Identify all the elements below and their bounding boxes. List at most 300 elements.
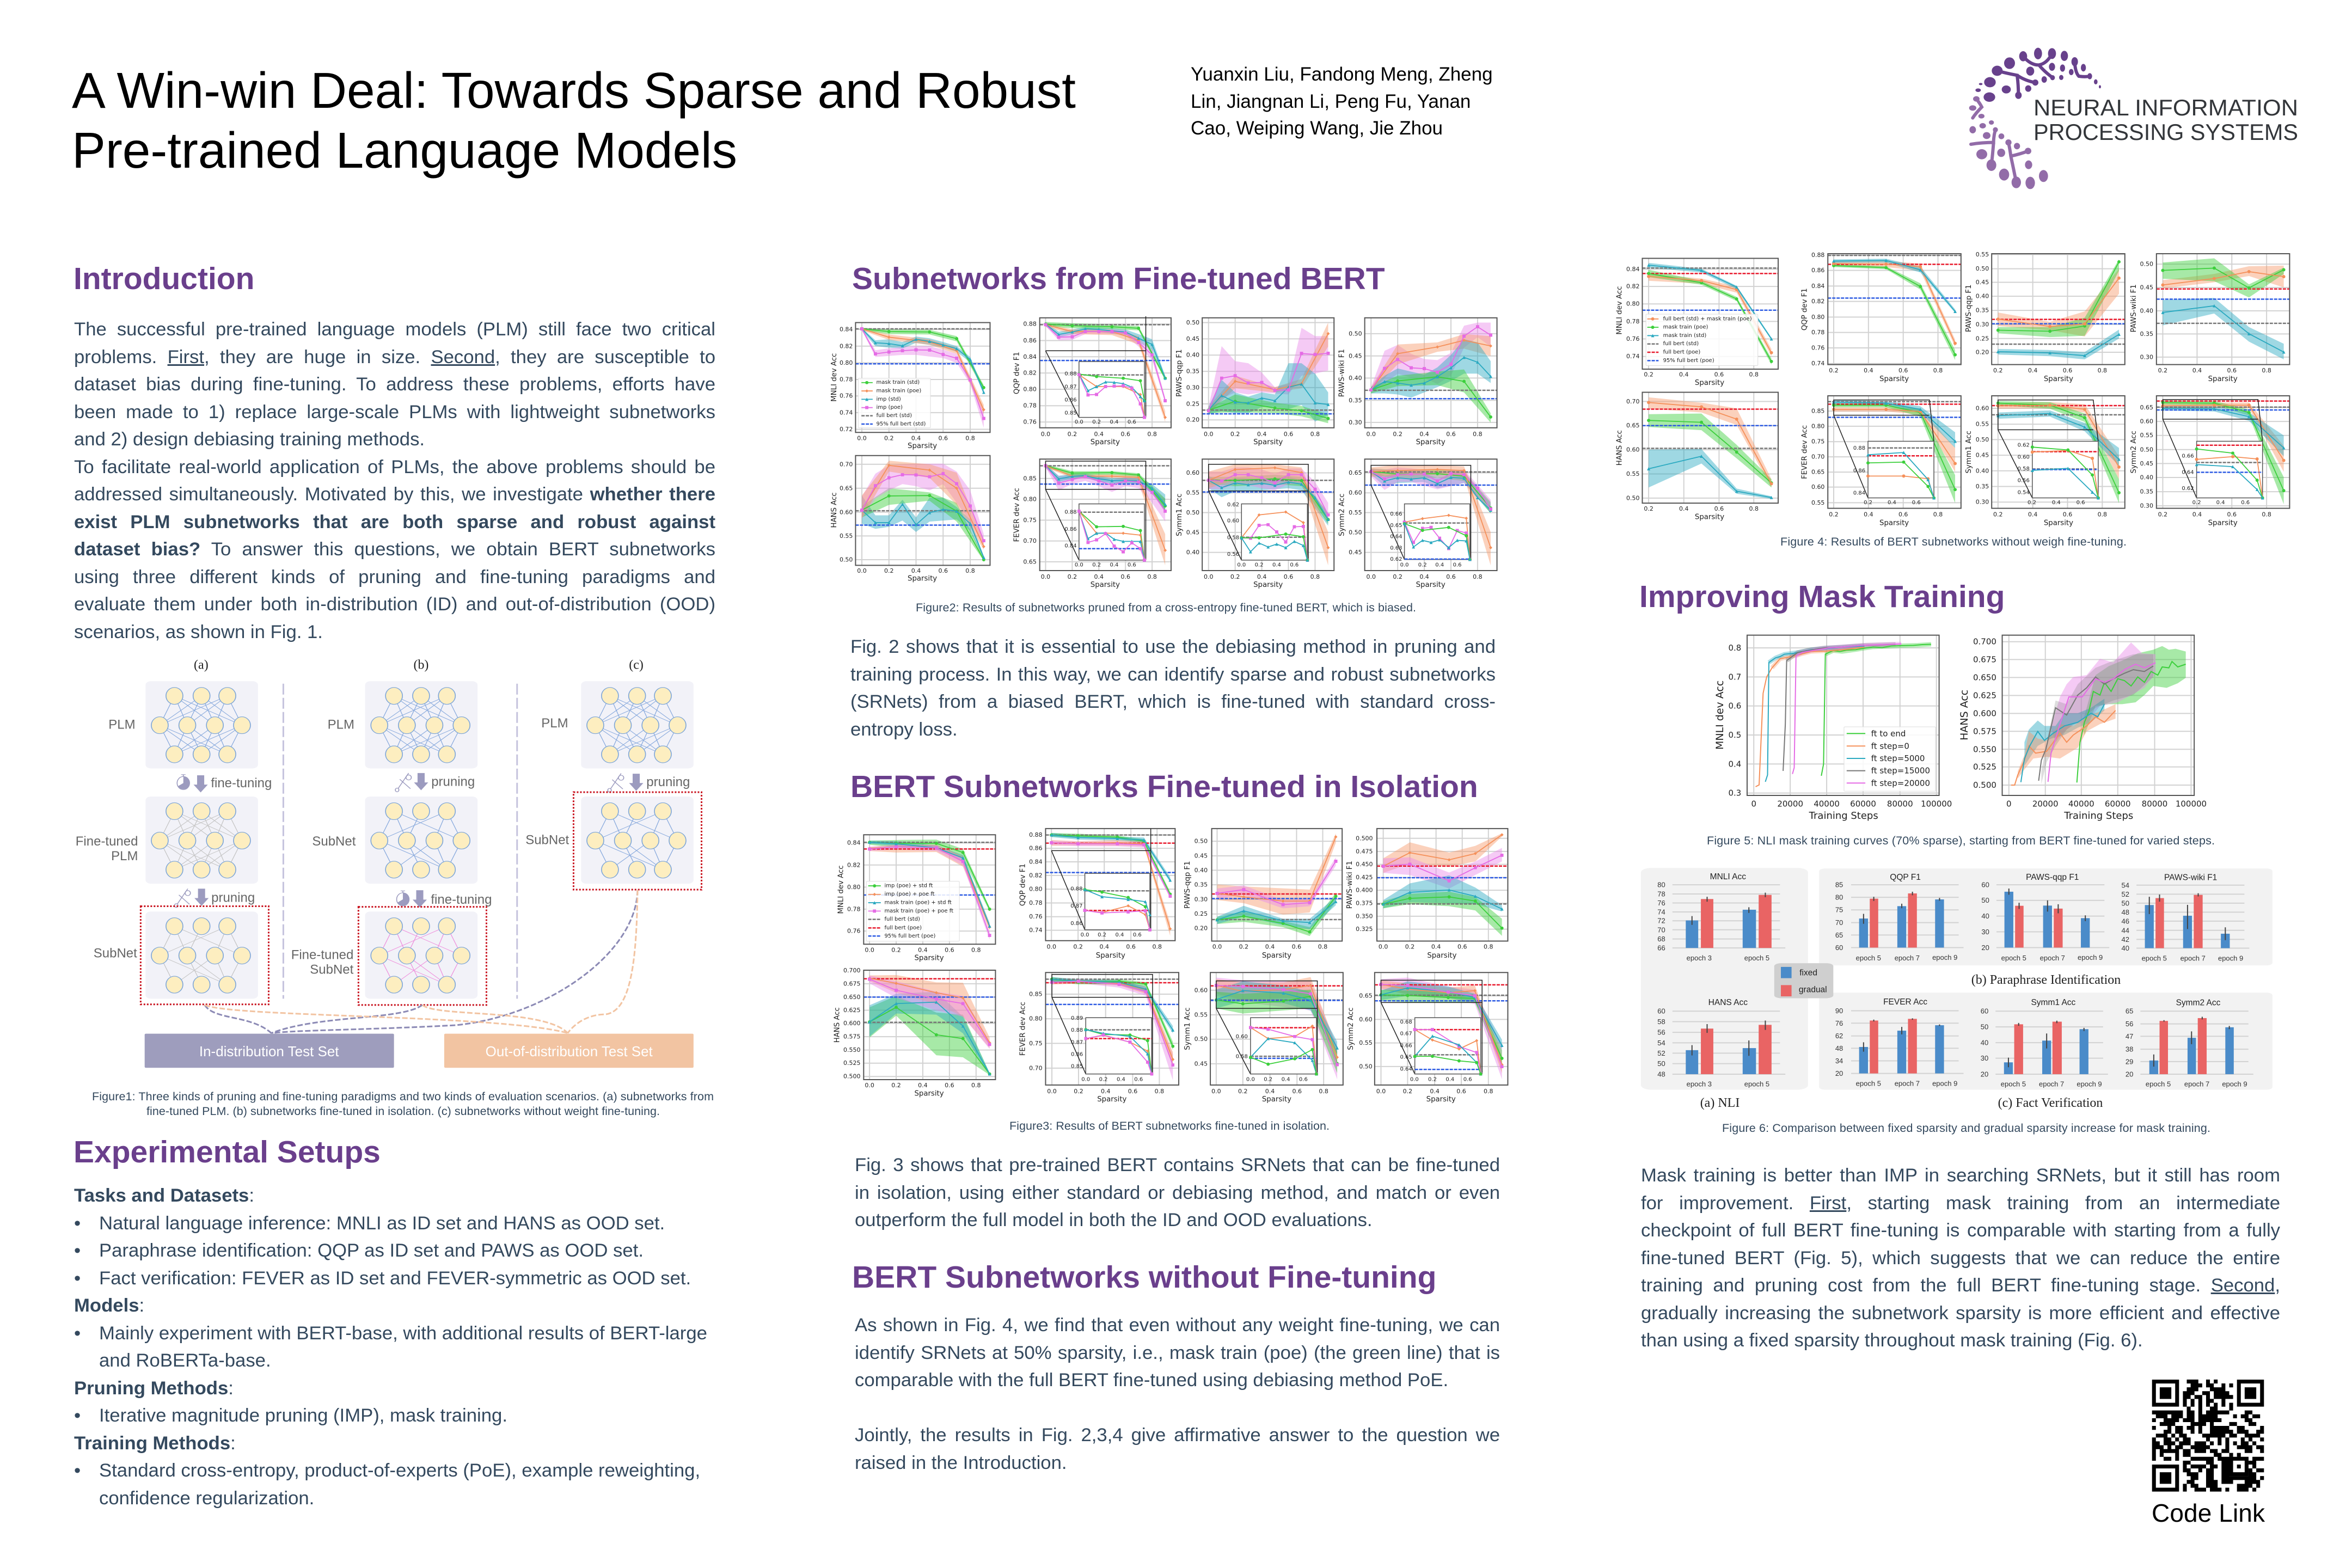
chart: MNLI Acc bars (1657, 872, 1785, 962)
chart: HANS Acc bars: 56 (1657, 1028, 1665, 1037)
chart: QQP dev F1: 0.76 (1029, 913, 1043, 920)
chart: MNLI Acc bars: 78 (1657, 890, 1665, 898)
chart: Symm1 Acc: 0.30 (1976, 499, 1989, 506)
chart: Symm1 Acc: 0.6 (1293, 1088, 1302, 1095)
chart: Symm2 Acc: Sparsity (1416, 581, 1445, 589)
chart: FEVER dev Acc: 0.2 (1092, 562, 1101, 568)
text block: introduction: The successful pre-trained language models (PLM) still face two critical (74, 319, 715, 340)
chart: PAWS-qqp F1 (1965, 251, 2125, 383)
chart: Symm2 Acc bars: 20 (2126, 1070, 2133, 1078)
chart: Symm1 Acc: 0.6 (2077, 500, 2085, 506)
chart: PAWS-wiki F1 bars: 46 (2122, 917, 2129, 925)
chart: PAWS-wiki F1 (1338, 318, 1497, 446)
chart: Symm1 Acc (1965, 396, 2125, 528)
figure 3 caption: Figure3: Results of BERT subnetworks fine-tuned in isolation. (1009, 1119, 1330, 1132)
chart: FEVER dev Acc: 0.89 (1071, 1015, 1083, 1021)
chart: HANS Acc: 0.2 (1644, 505, 1653, 512)
chart: QQP dev F1: 0.78 (1023, 402, 1037, 409)
chart: Symm1 Acc: 0.0 (1211, 1088, 1221, 1095)
chart: HANS Acc training curve: 0 (2006, 799, 2012, 809)
chart: Symm2 Acc: 0.2 (1428, 1076, 1437, 1082)
legend: fixed and gradual (1774, 963, 1833, 998)
chart: QQP dev F1 (1019, 829, 1175, 960)
figure 6 subcaptions: (c) Fact Verification (1998, 1096, 2103, 1110)
chart: FEVER dev Acc: 0.6 (1134, 1076, 1143, 1082)
chart: PAWS-wiki F1: PAWS-wiki F1 (1338, 349, 1346, 397)
chart: QQP dev F1: Sparsity (1096, 952, 1125, 960)
chart: HANS Acc: Sparsity (1695, 513, 1724, 521)
chart: PAWS-wiki F1: 0.400 (1356, 887, 1373, 894)
text block: experimental setups list: Iterative magnitude pruning (IMP), mask training. (99, 1405, 507, 1426)
chart: Symm1 Acc: 0.62 (2018, 443, 2030, 449)
chart: Symm1 Acc: 0.50 (1195, 1036, 1208, 1043)
chart: Symm2 Acc: 0.64 (1390, 534, 1402, 540)
chart: Symm1 Acc: 0.0 (1204, 573, 1214, 580)
text block: experimental setups list: • (74, 1213, 81, 1234)
chart: MNLI dev Acc training curve: 100000 (1921, 799, 1952, 809)
chart: Symm1 Acc: 0.45 (1186, 529, 1199, 536)
chart: Symm1 Acc: 0.58 (1227, 535, 1239, 541)
chart: PAWS-wiki F1: 0.4 (1419, 431, 1429, 438)
chart: PAWS-qqp F1: Sparsity (2044, 375, 2073, 383)
chart: HANS Acc: 0.675 (843, 980, 861, 987)
authors: Cao, Weiping Wang, Jie Zhou (1191, 118, 1443, 139)
column c networks: SubNet (525, 832, 569, 847)
text block: introduction: addressed simultaneously. Motivated by this, we investigate whether there (74, 484, 715, 505)
text block: mask training discussion: gradually increasing the subnetwork sparsity is more efficient and effective (1641, 1302, 2280, 1323)
chart: PAWS-qqp F1: 0.20 (1195, 925, 1208, 932)
chart: MNLI dev Acc: imp (poe) + std ft (884, 883, 933, 889)
chart: QQP dev F1: 0.2 (1068, 431, 1077, 438)
chart: QQP dev F1: 0.88 (1029, 831, 1043, 838)
text block: introduction: evaluate them under both in-distribution (ID) and out-of-distribution (OOD) (74, 594, 715, 615)
chart: Symm1 Acc bars: 60 (1981, 1007, 1988, 1015)
chart: QQP dev F1: 0.88 (1811, 252, 1824, 259)
text block: introduction: problems. First, they are huge in size. Second, they are susceptible to (74, 346, 715, 367)
text block: figure 3 discussion: outperform the full model in both the ID and OOD evaluations. (855, 1210, 1373, 1230)
chart: Symm2 Acc bars: 29 (2126, 1057, 2133, 1065)
chart: FEVER dev Acc: 0.65 (1023, 558, 1037, 565)
chart: Symm1 Acc: 0.2 (2028, 500, 2036, 506)
chart: FEVER Acc bars: epoch 5 (1856, 1080, 1881, 1088)
chart: QQP dev F1: 0.8 (1153, 944, 1162, 951)
text block: mask training discussion: training and pruning cost from the full BERT fine-tuning stage. Second, (1641, 1275, 2280, 1296)
text block: introduction: been made to 1) replace large-scale PLMs with lightweight subnetworks (74, 402, 715, 422)
chart: PAWS-wiki F1 bars: 54 (2122, 881, 2129, 889)
chart: PAWS-qqp F1: 0.35 (1195, 881, 1208, 889)
text block: introduction: dataset bias? To answer this questions, we obtain BERT subnetworks (74, 539, 715, 560)
chart: FEVER Acc bars: 90 (1835, 1007, 1843, 1015)
chart: FEVER dev Acc: 0.4 (1888, 500, 1896, 506)
chart: PAWS-wiki F1 bars: 44 (2122, 926, 2129, 934)
figure 6 subcaptions: (a) NLI (1700, 1096, 1739, 1110)
chart: Symm1 Acc: 0.58 (1236, 1054, 1248, 1060)
chart: HANS Acc: 0.60 (840, 509, 853, 516)
chart: QQP dev F1: 0.84 (1029, 859, 1043, 866)
chart: MNLI dev Acc: 0.4 (1679, 371, 1688, 378)
figure 2 caption: Figure2: Results of subnetworks pruned from a cross-entropy fine-tuned BERT, which is biased. (916, 601, 1416, 614)
chart: PAWS-wiki F1: 0.475 (1356, 848, 1373, 855)
text block: introduction: exist PLM subnetworks that are both sparse and robust against (74, 512, 715, 532)
chart: Symm1 Acc: 0.35 (1976, 483, 1989, 490)
chart: PAWS-wiki F1: 0.500 (1356, 835, 1373, 842)
text block: mask training discussion (1641, 1165, 2280, 1351)
chart: Symm2 Acc: 0.50 (2140, 446, 2153, 453)
chart: PAWS-wiki F1 bars: 50 (2122, 899, 2129, 907)
chart: MNLI dev Acc: 0.2 (1644, 371, 1653, 378)
dashed evaluation arrows (205, 890, 638, 1033)
chart: PAWS-qqp F1 bars: epoch 9 (2078, 953, 2103, 961)
chart: Symm2 Acc: 0.64 (1400, 1066, 1412, 1072)
chart: FEVER dev Acc: 0.84 (1064, 543, 1077, 549)
logo: NeurIPS droplet spiral and wordmark: PROCESSING SYSTEMS (2033, 119, 2298, 145)
panel: fact verification (1819, 993, 2273, 1090)
chart: MNLI dev Acc: 0.78 (847, 905, 861, 912)
chart: HANS Acc: 0.6 (939, 567, 948, 574)
chart: MNLI dev Acc: 0.8 (1749, 371, 1759, 378)
title: Pre-trained Language Models (72, 122, 737, 179)
chart: PAWS-wiki F1: 0.425 (1356, 874, 1373, 881)
chart: MNLI dev Acc: Sparsity (1695, 379, 1724, 387)
chart: PAWS-qqp F1: 0.8 (1318, 944, 1327, 951)
chart: HANS Acc training curve: 60000 (2105, 799, 2131, 809)
text block: experimental setups list: Natural language inference: MNLI as ID set and HANS as OOD set. (99, 1213, 665, 1234)
chart: HANS Acc: 0.4 (1679, 505, 1688, 512)
chart: FEVER dev Acc: Sparsity (1879, 519, 1909, 528)
chart: MNLI Acc bars: 66 (1657, 944, 1665, 952)
chart: MNLI dev Acc: 0.82 (1626, 283, 1640, 290)
chart: MNLI dev Acc (1616, 258, 1778, 387)
chart: MNLI dev Acc: full bert (std) (884, 916, 920, 922)
chart: Symm1 Acc: 0.60 (1236, 1034, 1248, 1040)
chart: PAWS-qqp F1: 0.45 (1186, 335, 1199, 342)
text block: experimental setups list: • (74, 1405, 81, 1426)
chart: FEVER Acc bars: epoch 7 (1895, 1080, 1920, 1088)
chart: PAWS-wiki F1: Sparsity (2208, 375, 2238, 383)
chart: HANS Acc: 0.525 (843, 1059, 861, 1067)
chart: QQP F1 bars: 70 (1835, 918, 1843, 927)
chart: PAWS-wiki F1: 0.30 (1349, 419, 1362, 426)
chart: MNLI dev Acc: 0.0 (857, 434, 867, 442)
chart: PAWS-qqp F1 bars: 20 (1981, 944, 1989, 952)
chart: Symm2 Acc: 0.4 (1435, 562, 1444, 568)
chart: Symm2 Acc: 0.35 (2140, 488, 2153, 495)
chart: PAWS-wiki F1 (1346, 829, 1508, 960)
chart: Symm2 Acc: 0.65 (1400, 1055, 1412, 1061)
chart: Symm2 Acc bars (2126, 999, 2253, 1088)
chart: FEVER dev Acc: 0.8 (1933, 511, 1943, 518)
chart: PAWS-wiki F1: 0.350 (1356, 912, 1373, 920)
chart: HANS Acc: HANS Acc (830, 492, 838, 528)
chart: QQP dev F1: 0.6 (1133, 932, 1142, 938)
chart: PAWS-qqp F1 bars (1981, 873, 2109, 962)
chart: QQP dev F1: 0.0 (1046, 944, 1056, 951)
text block: figure 3 discussion: Fig. 3 shows that pre-trained BERT contains SRNets that can be fine-tuned (855, 1155, 1500, 1175)
chart: FEVER dev Acc (1019, 972, 1179, 1104)
chart: Symm2 Acc: 0.40 (2140, 474, 2153, 481)
title (72, 62, 1076, 179)
chart: MNLI dev Acc: mask train (poe) (877, 388, 921, 394)
chart: QQP dev F1: 0.86 (1064, 397, 1077, 403)
chart: HANS Acc bars: HANS Acc (1708, 998, 1748, 1007)
chart: PAWS-wiki F1 bars: epoch 7 (2180, 954, 2206, 963)
chart: Symm1 Acc: Symm1 Acc (1965, 431, 1973, 474)
chart: HANS Acc: Sparsity (908, 575, 937, 583)
chart: HANS Acc: 0.50 (840, 556, 853, 564)
chart: Symm2 Acc: 0.4 (1445, 1076, 1454, 1082)
chart: MNLI dev Acc training curve: 0.8 (1729, 643, 1741, 653)
chart: HANS Acc bars: 60 (1657, 1007, 1665, 1015)
chart: Symm1 Acc: 0.0 (1246, 1076, 1255, 1082)
chart: HANS Acc: 0.575 (843, 1033, 861, 1040)
chart: Symm2 Acc: 0.62 (2182, 486, 2194, 492)
chart: Symm1 Acc: 0.4 (1272, 562, 1281, 568)
chart: PAWS-wiki F1: 0.50 (1349, 330, 1362, 337)
chart: MNLI dev Acc: 0.6 (945, 946, 954, 953)
chart: PAWS-wiki F1: 0.0 (1366, 431, 1376, 438)
chart: PAWS-qqp F1: 0.4 (1257, 431, 1266, 438)
chart: PAWS-wiki F1: 0.45 (2140, 284, 2153, 291)
chart: QQP dev F1: 0.84 (1811, 283, 1824, 290)
chart: MNLI dev Acc: Sparsity (914, 954, 944, 963)
chart: Symm1 Acc: 0.0 (1237, 562, 1246, 568)
chart: Symm2 Acc: 0.6 (2241, 500, 2250, 506)
out-of-distribution test set box: Out-of-distribution Test Set (486, 1043, 653, 1059)
text block: figure 3 discussion (855, 1155, 1500, 1230)
chart: QQP F1 bars: epoch 5 (1856, 954, 1881, 962)
chart: FEVER dev Acc: 0.2 (1099, 1076, 1108, 1082)
chart: Symm2 Acc bars: epoch 5 (2146, 1080, 2171, 1088)
chart: Symm1 Acc: 0.55 (1195, 1011, 1208, 1018)
column titles (194, 658, 644, 672)
chart: Symm1 Acc bars: 40 (1981, 1039, 1988, 1047)
chart: QQP dev F1: 0.80 (1023, 385, 1037, 393)
chart: MNLI dev Acc training curve: ft step=0 (1871, 741, 1909, 751)
chart: PAWS-qqp F1: 0.40 (1186, 352, 1199, 359)
chart: MNLI Acc bars: 74 (1657, 908, 1665, 916)
column a networks: SubNet (94, 946, 137, 961)
chart: Symm2 Acc: 0.2 (2158, 511, 2167, 518)
text block: experimental setups list: Standard cross-entropy, product-of-experts (PoE), example reweighting, (99, 1460, 700, 1481)
chart: QQP F1 bars: epoch 7 (1895, 954, 1920, 962)
chart: PAWS-wiki F1: 0.6 (2227, 367, 2237, 374)
chart: PAWS-wiki F1: 0.50 (2140, 261, 2153, 268)
text block: figure 4 discussion (855, 1315, 1500, 1473)
text block: experimental setups list: Paraphrase identification: QQP as ID set and PAWS as OOD set. (99, 1240, 644, 1261)
chart: MNLI dev Acc training curve: ft to end (1871, 728, 1906, 738)
chart: Symm1 Acc: 0.60 (1186, 469, 1199, 476)
chart: Symm2 Acc: 0.4 (1430, 1088, 1440, 1095)
chart: QQP dev F1: 0.86 (1029, 845, 1043, 852)
chart: PAWS-qqp F1 bars: PAWS-qqp F1 (2026, 873, 2079, 882)
chart: Symm2 Acc bars: Symm2 Acc (2176, 999, 2221, 1008)
chart: QQP dev F1: 0.4 (1115, 932, 1124, 938)
chart: PAWS-wiki F1: PAWS-wiki F1 (2130, 284, 2138, 332)
chart: HANS Acc training curve: 0.600 (1973, 708, 1996, 718)
chart: Symm1 Acc: 0.4 (2052, 500, 2061, 506)
chart: HANS Acc: 0.6 (1714, 505, 1724, 512)
chart: QQP F1 bars: 65 (1835, 931, 1843, 939)
column b networks: pruning (431, 775, 475, 789)
figure 6: fixed versus gradual sparsity bar charts (1641, 868, 2273, 1090)
chart: Symm2 Acc: Symm2 Acc (2130, 431, 2138, 474)
chart: FEVER dev Acc: 0.88 (1064, 509, 1077, 515)
chart: MNLI dev Acc: imp (poe) (877, 405, 903, 411)
chart: MNLI dev Acc training curve: ft step=20000 (1871, 778, 1930, 788)
text block: introduction: To facilitate real-world application of PLMs, the above problems should be (74, 456, 715, 477)
chart: PAWS-qqp F1: 0.2 (1993, 367, 2003, 374)
chart: PAWS-qqp F1: 0.6 (1284, 431, 1293, 438)
text block: mask training discussion: fine-tuned BERT (Fig. 5), which suggests that we can reduce the entire (1641, 1248, 2280, 1269)
text block: introduction: using three different kinds of pruning and fine-tuning paradigms and (74, 566, 715, 587)
text block: mask training discussion: than using a fixed sparsity throughout mask training (Fig. 6). (1641, 1330, 2143, 1351)
chart: QQP dev F1: 0.4 (1094, 431, 1104, 438)
column b networks (291, 681, 492, 1005)
chart: MNLI dev Acc: MNLI dev Acc (1616, 286, 1624, 335)
text block: experimental setups list: Training Methods: (74, 1433, 236, 1454)
chart: MNLI dev Acc: 0.72 (840, 426, 853, 433)
chart: QQP dev F1: 0.2 (1829, 367, 1839, 374)
chart: QQP F1 bars: 80 (1835, 893, 1843, 902)
text block: figure 4 discussion: As shown in Fig. 4, we find that even without any weight fine-tuning, we can (855, 1315, 1500, 1336)
chart: QQP dev F1: 0.86 (1070, 921, 1082, 927)
chart: FEVER Acc bars: FEVER Acc (1883, 997, 1927, 1007)
legend: fixed and gradual: fixed (1799, 968, 1817, 977)
chart: HANS Acc bars: 48 (1657, 1070, 1665, 1078)
chart: PAWS-wiki F1: 0.6 (1446, 431, 1456, 438)
chart: MNLI Acc bars: epoch 5 (1744, 954, 1769, 962)
figure 1 caption: Figure1: Three kinds of pruning and fine-tuning paradigms and two kinds of evaluation scenarios. (a) subnetworks from (92, 1090, 714, 1103)
chart: Symm2 Acc: Sparsity (1426, 1095, 1456, 1104)
chart: MNLI dev Acc: 0.8 (965, 434, 975, 442)
chart: MNLI dev Acc: MNLI dev Acc (830, 353, 838, 402)
text block: figure 4 discussion: identify SRNets at 50% sparsity, i.e., mask train (poe) (the green line) that is (855, 1343, 1500, 1363)
chart: FEVER dev Acc: FEVER dev Acc (1800, 425, 1809, 479)
chart: Symm2 Acc: 0.2 (1403, 1088, 1412, 1095)
chart: HANS Acc: 0.625 (843, 1007, 861, 1014)
chart: QQP dev F1: 0.0 (1081, 932, 1089, 938)
chart: QQP dev F1: 0.2 (1073, 944, 1083, 951)
chart: PAWS-qqp F1: PAWS-qqp F1 (1184, 861, 1192, 909)
text block: experimental setups list: and RoBERTa-base. (99, 1350, 271, 1371)
chart: Symm2 Acc: 0.65 (1349, 469, 1362, 476)
chart: MNLI Acc bars: 80 (1657, 881, 1665, 889)
chart: PAWS-wiki F1 bars: 40 (2122, 944, 2129, 952)
chart: MNLI dev Acc: 0.76 (1626, 335, 1640, 342)
chart: Symm2 Acc: 0.2 (1418, 562, 1427, 568)
chart: Symm2 Acc bars: 65 (2126, 1007, 2133, 1015)
text block: mask training discussion: Mask training is better than IMP in searching SRNets, but it still has room (1641, 1165, 2280, 1186)
text block: figure 3 discussion: in isolation, using either standard or debiasing method, and match or even (855, 1183, 1500, 1203)
chart: Symm1 Acc: 0.6 (1299, 1076, 1308, 1082)
chart: QQP dev F1: 0.88 (1064, 371, 1077, 377)
chart: PAWS-qqp F1: 0.0 (1204, 431, 1214, 438)
chart: MNLI Acc bars: MNLI Acc (1710, 872, 1746, 881)
logo: NeurIPS droplet spiral and wordmark (1969, 48, 2298, 189)
chart: FEVER dev Acc: 0.0 (1041, 573, 1050, 580)
chart: HANS Acc: 0.2 (884, 567, 893, 574)
chart: Symm2 Acc: 0.55 (2140, 432, 2153, 439)
chart: HANS Acc bars: 54 (1657, 1039, 1665, 1047)
chart: FEVER dev Acc: 0.65 (1811, 469, 1824, 476)
chart: QQP dev F1: 0.6 (1128, 419, 1136, 425)
chart: FEVER dev Acc: FEVER dev Acc (1019, 1002, 1027, 1056)
chart: PAWS-qqp F1: 0.50 (1976, 265, 1989, 272)
chart: QQP dev F1: Sparsity (1091, 438, 1120, 446)
chart: PAWS-qqp F1: 0.35 (1186, 368, 1199, 375)
chart: QQP F1 bars: epoch 9 (1932, 953, 1957, 961)
chart: QQP dev F1 (1800, 252, 1961, 383)
column b networks: fine-tuning (431, 892, 492, 907)
chart: Symm1 Acc: 0.60 (1227, 518, 1239, 524)
chart: Symm1 Acc: 0.58 (2018, 466, 2030, 472)
chart: MNLI dev Acc training curve: 0 (1751, 799, 1756, 809)
chart: Symm2 Acc (1347, 972, 1508, 1104)
chart: FEVER Acc bars: epoch 9 (1932, 1080, 1957, 1088)
chart: HANS Acc training curve: 0.575 (1973, 726, 1996, 736)
chart: PAWS-wiki F1 bars: epoch 9 (2218, 954, 2243, 962)
chart: Symm2 Acc: 0.4 (2192, 511, 2202, 518)
chart: FEVER dev Acc: 0.4 (1101, 1088, 1110, 1095)
chart: MNLI dev Acc (830, 323, 990, 450)
chart: PAWS-wiki F1: 0.35 (2140, 330, 2153, 338)
chart: PAWS-wiki F1: 0.450 (1356, 861, 1373, 868)
chart: Symm2 Acc: 0.8 (1473, 573, 1483, 580)
chart: FEVER dev Acc: 0.86 (1071, 1052, 1083, 1058)
chart: MNLI dev Acc: 0.0 (865, 946, 874, 953)
chart: Symm2 Acc bars: 56 (2126, 1020, 2133, 1028)
chart: PAWS-wiki F1: 0.2 (2158, 367, 2167, 374)
chart: Symm1 Acc: 0.45 (1976, 452, 1989, 459)
chart: QQP dev F1: QQP dev F1 (1019, 863, 1027, 906)
figure 4 caption: Figure 4: Results of BERT subnetworks without weigh fine-tuning. (1780, 535, 2127, 548)
chart: FEVER dev Acc: 0.2 (1864, 500, 1872, 506)
chart: QQP dev F1: 0.87 (1064, 384, 1077, 390)
chart: PAWS-wiki F1 bars: 52 (2122, 890, 2129, 898)
column b networks: SubNet (310, 962, 354, 977)
text block: experimental setups list: confidence regularization. (99, 1487, 314, 1508)
chart: Symm1 Acc: 0.8 (1310, 573, 1320, 580)
chart: MNLI dev Acc: mask train (std) (1663, 333, 1706, 339)
chart: HANS Acc training curve: 80000 (2142, 799, 2167, 809)
chart: HANS Acc: 0.65 (1626, 422, 1640, 429)
chart: FEVER dev Acc: 0.85 (1029, 991, 1043, 998)
chart: Symm1 Acc: 0.8 (1319, 1088, 1328, 1095)
chart: PAWS-qqp F1 (1175, 318, 1334, 446)
chart: PAWS-wiki F1 bars: 48 (2122, 908, 2129, 916)
QR code (2152, 1380, 2264, 1492)
chart: Symm1 Acc bars: epoch 9 (2077, 1080, 2102, 1088)
text block: experimental setups list: • (74, 1460, 81, 1481)
text block: figure 4 discussion: Jointly, the results in Fig. 2,3,4 give affirmative answer to the question we (855, 1425, 1500, 1445)
chart: FEVER dev Acc: 0.75 (1023, 517, 1037, 524)
chart: Symm2 Acc: 0.66 (1400, 1043, 1412, 1049)
chart: FEVER Acc bars: 34 (1835, 1057, 1843, 1065)
chart: PAWS-qqp F1 bars: epoch 5 (2001, 954, 2026, 962)
chart: MNLI dev Acc training curve: 0.5 (1729, 730, 1741, 740)
chart: FEVER Acc bars: 76 (1835, 1019, 1843, 1027)
chart: Symm1 Acc (1184, 972, 1343, 1104)
chart: Symm2 Acc: 0.62 (1390, 556, 1402, 562)
chart: Symm2 Acc: 0.0 (1410, 1076, 1419, 1082)
chart: PAWS-wiki F1: 0.2 (1405, 944, 1414, 951)
chart: MNLI dev Acc: 0.82 (840, 342, 853, 350)
chart: FEVER dev Acc: 0.75 (1029, 1040, 1043, 1047)
chart: FEVER dev Acc: 0.86 (1853, 468, 1865, 474)
chart: Symm2 Acc: 0.4 (1419, 573, 1429, 580)
chart: PAWS-wiki F1: 0.6 (1457, 944, 1467, 951)
chart: MNLI dev Acc: 0.8 (971, 946, 981, 953)
